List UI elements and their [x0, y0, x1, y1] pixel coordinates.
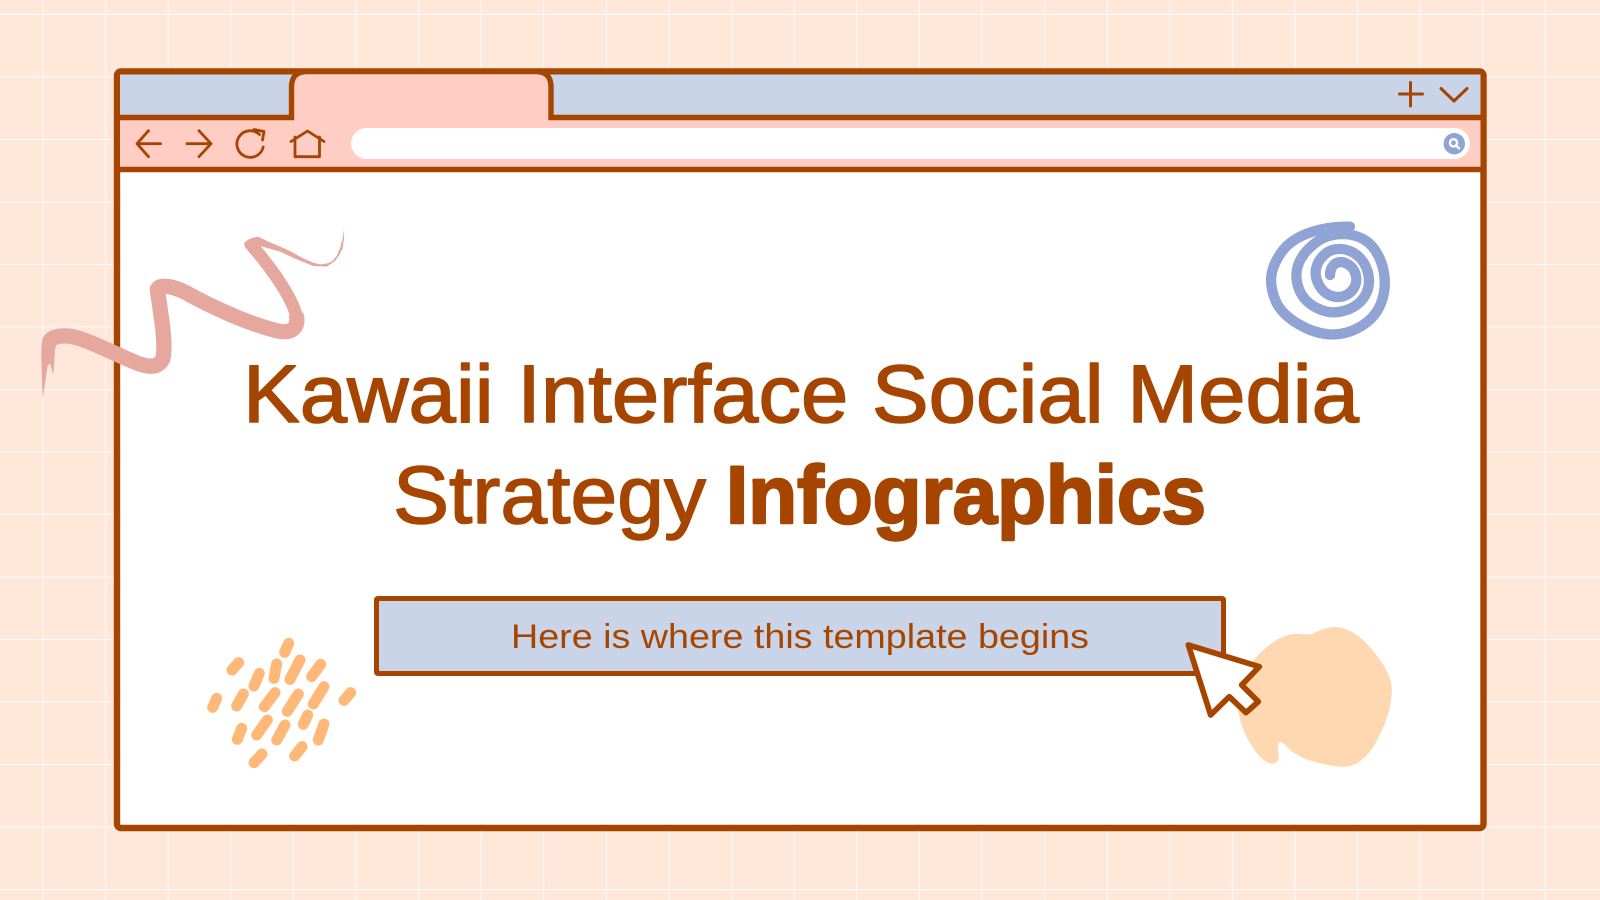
toolbar	[120, 118, 1480, 170]
decoration: pink brush ribbon	[41, 229, 344, 398]
icon: reload	[237, 130, 264, 157]
title line 2: regular: Strategy	[393, 450, 706, 541]
icon: home	[291, 131, 324, 157]
title line 2: bold: Infographics	[726, 450, 1206, 541]
title	[243, 349, 1359, 541]
tab bar	[120, 74, 1480, 118]
decoration: peach blob	[1238, 627, 1392, 767]
ribbon frayed bottom tail	[41, 336, 58, 398]
icon: back arrow	[137, 131, 160, 157]
ribbon upper stroke	[252, 245, 297, 317]
address bar	[351, 128, 1470, 159]
tab fill patch	[294, 110, 548, 122]
subtitle box frame	[376, 598, 1224, 674]
decoration: blue spiral	[1271, 227, 1385, 334]
icon: search button	[1444, 133, 1465, 154]
icon: forward arrow	[187, 131, 211, 157]
window body	[117, 72, 1484, 828]
active tab	[117, 72, 1484, 118]
icon: new tab plus	[1400, 82, 1422, 106]
icon: tab list chevron	[1441, 88, 1467, 101]
subtitle box	[376, 598, 1224, 674]
ribbon main stroke	[50, 286, 297, 366]
icon: mouse cursor	[1188, 645, 1259, 715]
toolbar bottom border	[117, 167, 1484, 172]
ribbon thin top tail	[244, 229, 344, 267]
decoration: orange dash cluster	[213, 643, 351, 763]
title line 1: Kawaii Interface Social Media	[243, 349, 1359, 440]
subtitle text: Here is where this template begins	[511, 618, 1089, 656]
panel: browser window	[117, 72, 1484, 828]
